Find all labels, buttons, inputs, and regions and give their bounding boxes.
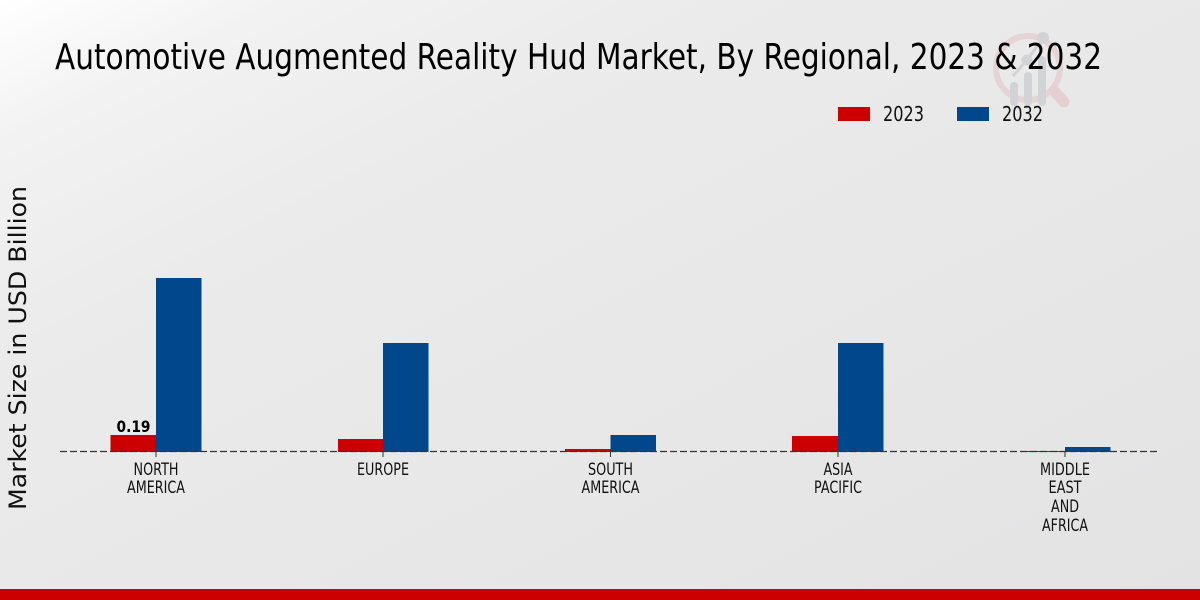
legend item: 2032: 2032 <box>1002 102 1043 126</box>
bars: South America <box>565 435 656 452</box>
data label: 0.19 <box>116 417 150 436</box>
x axis labels <box>127 460 1090 536</box>
label: South America: SOUTH <box>588 460 633 480</box>
label: Europe: EUROPE <box>357 460 409 480</box>
label: Asia Pacific: ASIA <box>824 460 853 480</box>
label: South America: AMERICA <box>582 478 640 498</box>
bar chart <box>60 278 1160 457</box>
label: Middle East and Africa: EAST <box>1048 478 1082 498</box>
footer bar <box>0 589 1200 600</box>
legend <box>838 102 1043 126</box>
label: Middle East and Africa: MIDDLE <box>1040 460 1090 480</box>
bars: Middle East and Africa <box>1020 447 1110 452</box>
legend item: 2023 <box>838 102 924 126</box>
label: North America: NORTH <box>134 460 178 480</box>
bars: Asia Pacific <box>792 343 884 452</box>
label: North America: AMERICA <box>127 478 185 498</box>
bars: North America <box>110 278 202 452</box>
label: Asia Pacific: PACIFIC <box>814 478 862 498</box>
label: Middle East and Africa: AND <box>1051 497 1079 517</box>
y axis label: Market Size in USD Billion <box>4 186 32 510</box>
watermark logo <box>996 32 1064 102</box>
legend item: 2032 <box>957 102 1043 126</box>
bars: Europe <box>338 343 428 452</box>
legend item: 2023: 2023 <box>883 102 924 126</box>
label: Middle East and Africa: AFRICA <box>1042 516 1088 536</box>
